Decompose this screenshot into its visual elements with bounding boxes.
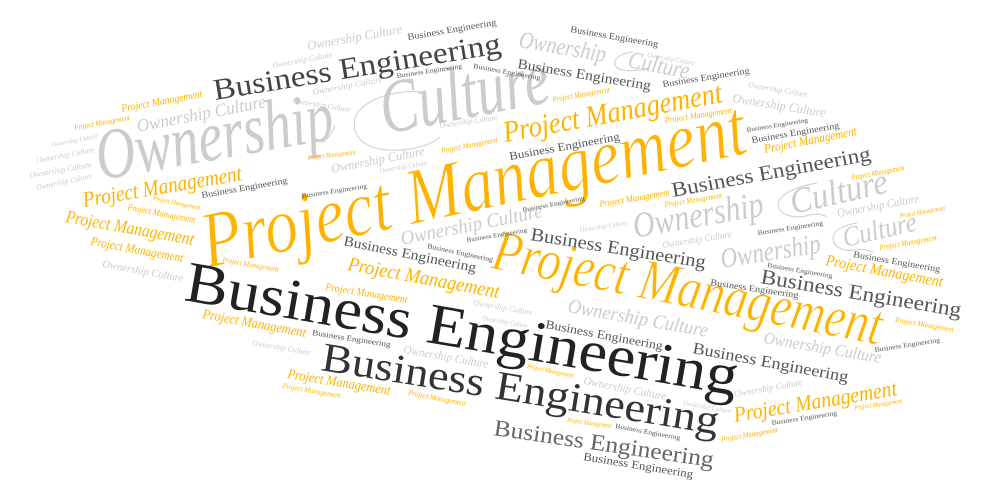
small repeated Ownership Culture phrases: Ownership Culture [582, 375, 667, 403]
word: third Project Management: Project Management [499, 76, 725, 149]
small repeated Ownership Culture phrases [29, 21, 921, 415]
small repeated Ownership Culture phrases: Ownership Culture [482, 314, 528, 330]
small repeated Project Management phrases [63, 85, 955, 444]
small repeated Project Management phrases: Project Management [898, 204, 946, 220]
small repeated Project Management phrases: Project Management [731, 375, 899, 427]
small repeated Business Engineering phrases: Business Engineering [771, 410, 838, 427]
word: upper Business Engineering: Business Engineering [211, 27, 503, 107]
small repeated Project Management phrases: Project Management [598, 188, 671, 210]
small repeated Ownership Culture phrases: Ownership Culture [402, 342, 490, 371]
small repeated Project Management phrases: Project Management [823, 252, 945, 291]
word: large Ownership: Ownership [89, 75, 339, 196]
small repeated Project Management phrases: Project Management [281, 381, 342, 400]
small repeated Ownership Culture phrases: Ownership Culture [36, 145, 96, 165]
small repeated Ownership Culture phrases: Ownership Culture [272, 50, 334, 70]
small repeated Business Engineering phrases: Business Engineering [691, 338, 850, 386]
small repeated Project Management phrases: Project Management [89, 233, 185, 265]
small repeated Ownership Culture phrases: Ownership Culture [101, 258, 184, 285]
small repeated Ownership Culture phrases: Ownership Culture [252, 338, 312, 357]
word: top Ownership Culture: Ownership [517, 27, 608, 68]
small repeated Business Engineering phrases: Business Engineering [396, 63, 463, 80]
small repeated Project Management phrases: Project Management [440, 135, 499, 155]
word: large Ownership [89, 75, 339, 196]
small repeated Project Management phrases: Project Management [878, 233, 938, 252]
small repeated Business Engineering phrases: Business Engineering [583, 451, 694, 481]
small repeated Ownership Culture phrases: Ownership Culture [566, 295, 710, 342]
small repeated Business Engineering phrases: Business Engineering [853, 249, 942, 274]
small repeated Ownership Culture phrases: Ownership Culture [662, 230, 733, 251]
small repeated Ownership Culture phrases: Ownership Culture [439, 113, 498, 130]
small repeated Project Management phrases: Project Management [119, 88, 204, 115]
small repeated Business Engineering phrases [201, 18, 964, 481]
small repeated Ownership Culture phrases: Ownership Culture [135, 91, 267, 136]
small repeated Ownership Culture phrases: Ownership Culture [306, 21, 403, 53]
small repeated Ownership Culture phrases: Ownership Culture [312, 74, 383, 97]
small repeated Business Engineering phrases: Business Engineering [662, 65, 751, 89]
small repeated Project Management phrases: Project Management [663, 105, 733, 125]
word: top Ownership Culture: Culture [626, 47, 692, 85]
small repeated Project Management phrases: Project Management [566, 416, 613, 430]
small repeated Business Engineering phrases: Business Engineering [759, 264, 964, 322]
small repeated Project Management phrases: Project Management [551, 85, 611, 104]
small repeated Project Management phrases: Project Management [663, 191, 723, 209]
word: second Project Management: Project Management [487, 217, 890, 358]
small repeated Ownership Culture phrases: Ownership Culture [399, 200, 544, 250]
small repeated Ownership Culture phrases: Ownership Culture [647, 51, 695, 67]
word group: Business Engineering [181, 18, 964, 481]
small repeated Project Management phrases: Project Management [285, 367, 392, 399]
small repeated Project Management phrases: Project Management [526, 362, 575, 380]
small repeated Project Management phrases: Project Management [407, 388, 467, 408]
small repeated Project Management phrases: Project Management [306, 148, 357, 162]
small repeated Ownership Culture phrases: Ownership Culture [734, 378, 803, 400]
small repeated Business Engineering phrases: Business Engineering [473, 62, 542, 82]
small repeated Project Management phrases: Project Management [345, 253, 502, 303]
word: second Business Engineering: Business Engineering [319, 333, 723, 443]
small repeated Ownership Culture phrases: Ownership Culture [379, 159, 428, 175]
word: lower Ownership: Ownership [718, 228, 823, 275]
small repeated Business Engineering phrases: Business Engineering [710, 277, 800, 300]
small repeated Ownership Culture phrases: Ownership Culture [51, 132, 99, 149]
small repeated Project Management phrases: Project Management [152, 194, 202, 212]
small repeated Ownership Culture phrases: Ownership Culture [292, 96, 352, 114]
word: top Ownership Culture [517, 27, 692, 85]
small repeated Business Engineering phrases: Business Engineering [670, 141, 873, 202]
word: largest Project Management: Project Management [192, 84, 755, 286]
small repeated Business Engineering phrases: Business Engineering [569, 25, 659, 50]
small repeated Business Engineering phrases: Business Engineering [529, 225, 707, 273]
small repeated Business Engineering phrases: Business Engineering [301, 183, 368, 200]
word: large Culture with swash: Culture [372, 36, 556, 151]
small repeated Ownership Culture phrases: Ownership Culture [748, 80, 809, 99]
word: right Ownership: Ownership [629, 184, 766, 246]
small repeated Ownership Culture phrases: Ownership Culture [473, 298, 534, 317]
word group: Ownership Culture [29, 21, 921, 415]
small repeated Business Engineering phrases: Business Engineering [427, 242, 494, 264]
small repeated Business Engineering phrases: Business Engineering [466, 227, 528, 244]
word: lower Business Engineering: Business Engineering [492, 415, 716, 472]
small repeated Ownership Culture phrases: Ownership Culture [36, 171, 94, 192]
small repeated Business Engineering phrases: Business Engineering [757, 220, 824, 237]
small repeated Ownership Culture phrases: Ownership Culture [762, 328, 883, 367]
small repeated Ownership Culture phrases: Ownership Culture [836, 191, 921, 220]
small repeated Project Management phrases: Project Management [73, 113, 131, 132]
small repeated Project Management phrases: Project Management [720, 425, 779, 444]
small repeated Ownership Culture phrases: Ownership Culture [330, 143, 426, 176]
small repeated Business Engineering phrases: Business Engineering [516, 57, 652, 94]
small repeated Business Engineering phrases: Business Engineering [342, 234, 477, 276]
small repeated Business Engineering phrases: Business Engineering [508, 131, 621, 163]
small repeated Ownership Culture phrases: Ownership Culture [732, 90, 827, 120]
small repeated Business Engineering phrases: Business Engineering [312, 328, 391, 349]
small repeated Project Management phrases: Project Management [126, 203, 196, 226]
small repeated Business Engineering phrases: Business Engineering [751, 120, 841, 145]
small repeated Business Engineering phrases: Business Engineering [767, 262, 834, 280]
small repeated Business Engineering phrases: Business Engineering [746, 117, 809, 134]
small repeated Project Management phrases: Project Management [894, 315, 955, 334]
small repeated Business Engineering phrases: Business Engineering [201, 175, 289, 200]
small repeated Project Management phrases: Project Management [200, 307, 308, 341]
small repeated Business Engineering phrases: Business Engineering [874, 337, 941, 354]
word: large Culture with swash [354, 36, 556, 151]
small repeated Business Engineering phrases: Business Engineering [407, 18, 498, 43]
small repeated Project Management phrases: Project Management [221, 255, 280, 274]
small repeated Business Engineering phrases: Business Engineering [544, 317, 664, 353]
word: right Culture with swash: Culture [786, 161, 891, 222]
small repeated Project Management phrases: Project Management [850, 163, 906, 182]
small repeated Ownership Culture phrases: Ownership Culture [579, 219, 628, 234]
small repeated Project Management phrases: Project Management [324, 281, 409, 306]
small repeated Project Management phrases: Project Management [80, 160, 244, 212]
word: largest Business Engineering: Business Engineering [181, 249, 744, 408]
small repeated Project Management phrases: Project Management [853, 397, 904, 412]
word: lower Culture with swash: Culture [840, 207, 920, 254]
small repeated Business Engineering phrases: Business Engineering [522, 195, 586, 214]
word group: Project Management [63, 76, 955, 444]
small repeated Business Engineering phrases: Business Engineering [615, 423, 681, 442]
small repeated Project Management phrases: Project Management [762, 123, 858, 156]
small repeated Ownership Culture phrases: Ownership Culture [29, 159, 93, 180]
small repeated Project Management phrases: Project Management [63, 206, 197, 249]
small repeated Ownership Culture phrases: Ownership Culture [683, 399, 731, 415]
